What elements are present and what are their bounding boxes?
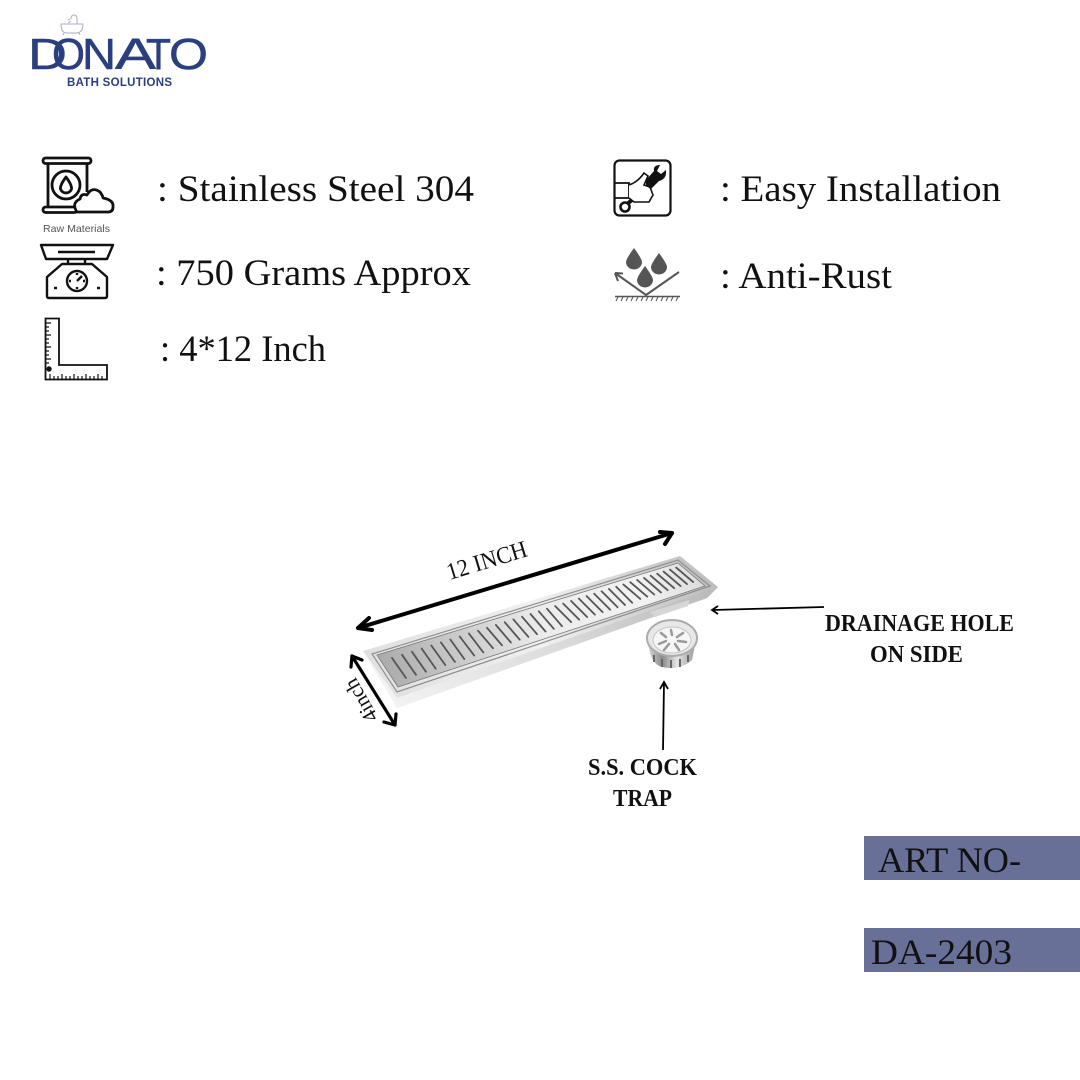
icon: weighing scale bbox=[41, 245, 113, 298]
icon caption: raw materials: Raw Materials bbox=[43, 223, 110, 235]
icon: easy installation bbox=[614, 160, 670, 216]
label: drainage hole on side bbox=[825, 611, 1014, 668]
drain slots bbox=[392, 568, 693, 678]
spec: weight: : 750 Grams Approx bbox=[156, 253, 472, 294]
logo wordmark: O bbox=[169, 30, 208, 79]
spec: anti-rust: : Anti-Rust bbox=[720, 256, 893, 297]
arrow: 4 inch width bbox=[351, 656, 396, 725]
spec: size: : 4*12 Inch bbox=[160, 329, 326, 370]
badge: art no: ART NO- bbox=[878, 840, 1021, 880]
logo wordmark: N bbox=[82, 30, 116, 79]
label: s.s. cock trap: TRAP bbox=[613, 786, 672, 812]
logo wordmark: T bbox=[146, 30, 171, 79]
icon: bathtub bbox=[61, 15, 83, 35]
logo tagline: BATH SOLUTIONS bbox=[67, 77, 172, 89]
spec: easy installation: : Easy Installation bbox=[720, 169, 1001, 210]
arrow: 12 inch length bbox=[358, 532, 672, 630]
logo wordmark bbox=[28, 30, 208, 79]
logo wordmark: D bbox=[28, 30, 67, 79]
label: drainage hole on side: DRAINAGE HOLE bbox=[825, 611, 1014, 637]
icon: anti-rust drops bbox=[615, 248, 680, 301]
product: cock trap bbox=[647, 620, 697, 668]
arrow: to cock trap bbox=[660, 682, 668, 750]
badge: model number bbox=[864, 928, 1080, 972]
product: linear floor drain bbox=[363, 556, 718, 708]
label: 12 inch: 12 INCH bbox=[443, 537, 530, 586]
icon: raw materials barrel and cloud bbox=[43, 158, 113, 212]
badge: art no bbox=[864, 836, 1080, 880]
icon: set square ruler bbox=[46, 318, 107, 380]
logo wordmark: O bbox=[52, 30, 85, 79]
spec: material: : Stainless Steel 304 bbox=[157, 169, 474, 210]
label: drainage hole on side: ON SIDE bbox=[870, 642, 963, 668]
badge: model number: DA-2403 bbox=[871, 932, 1012, 972]
arrow: to drainage hole bbox=[712, 606, 824, 614]
logo wordmark: A bbox=[115, 30, 157, 79]
label: s.s. cock trap: S.S. COCK bbox=[588, 755, 697, 781]
label: s.s. cock trap bbox=[588, 755, 697, 812]
logo: Donato Bath Solutions bbox=[28, 15, 208, 89]
label: 4 inch: 4inch bbox=[339, 674, 383, 727]
